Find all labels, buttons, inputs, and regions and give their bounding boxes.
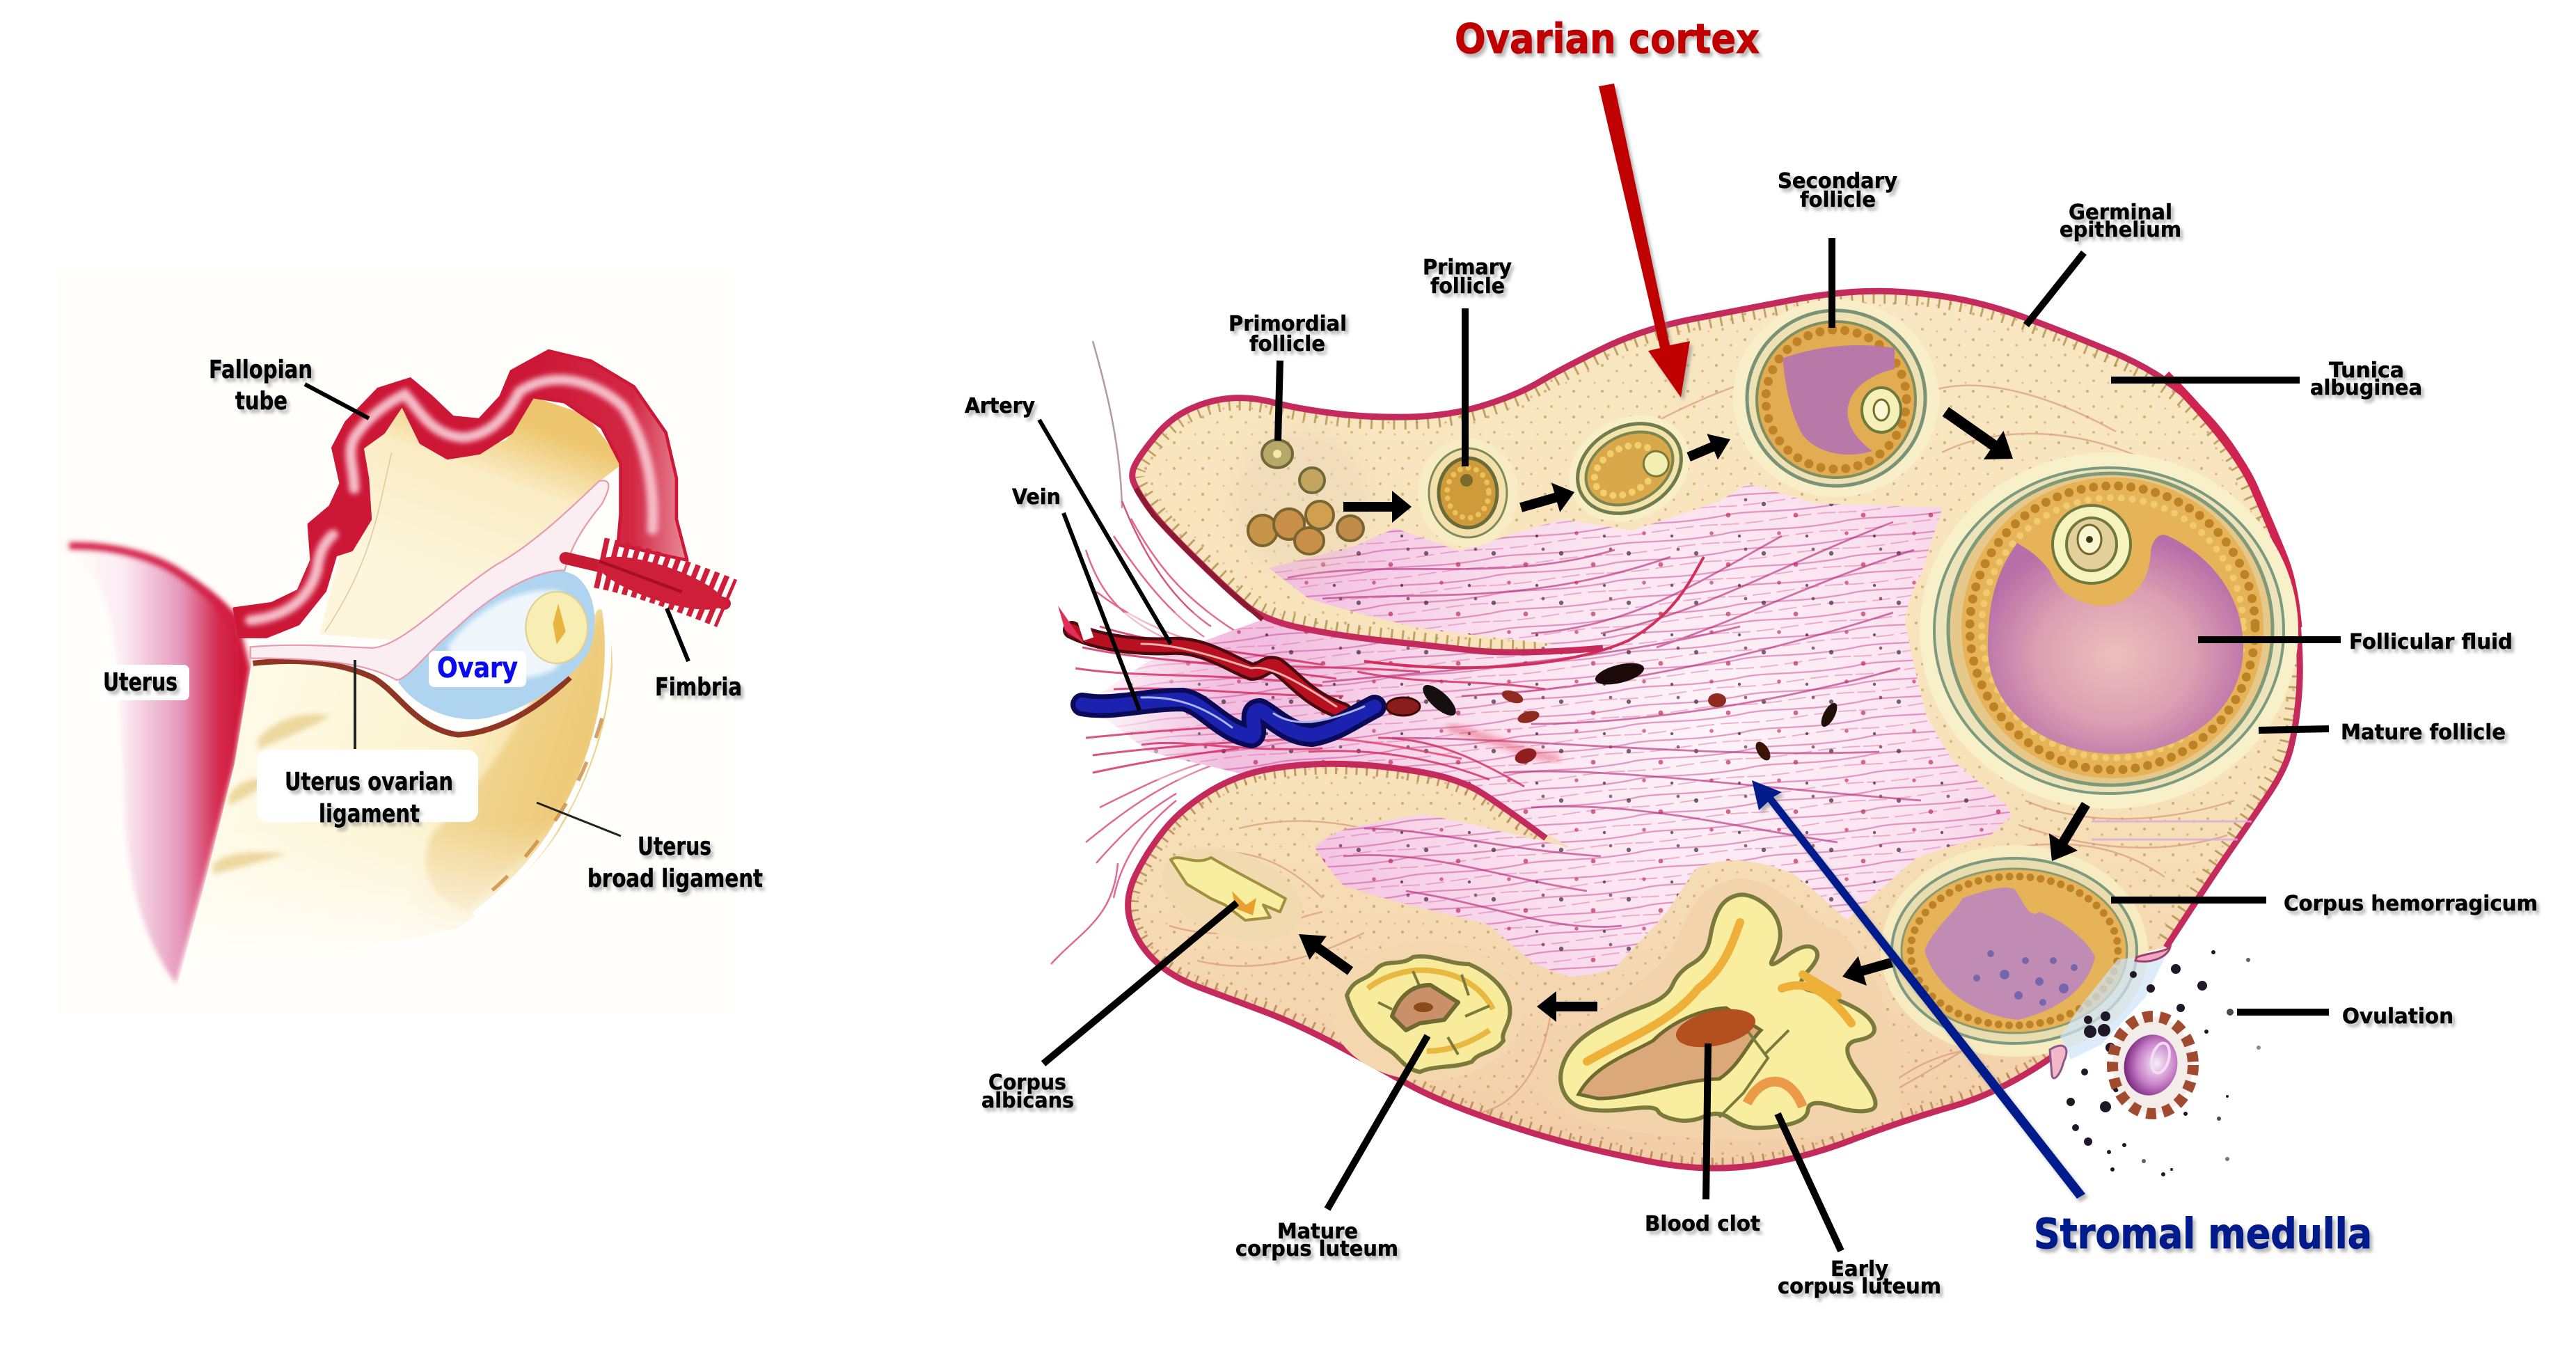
uterine wall	[58, 544, 251, 984]
label: fimbria: Fimbria	[655, 673, 742, 702]
hemorragicum granulosa	[1902, 869, 2127, 1033]
secondary antrum	[1783, 345, 1895, 455]
label box: uterus ovarian ligament	[257, 750, 478, 822]
corpus hemorragicum	[1881, 845, 2148, 1057]
ligament edge brown dashes	[490, 718, 602, 892]
artery highlight	[1141, 644, 1336, 707]
label: artery: Artery	[965, 394, 1035, 418]
secondary granules	[1766, 330, 1906, 469]
albicans body	[1171, 858, 1286, 920]
ovum highlight	[2149, 1041, 2172, 1075]
fallopian tube	[235, 351, 687, 637]
leader: uterus ovarian ligament	[354, 660, 356, 749]
mature granules inner	[1982, 498, 2243, 758]
medulla lower red stream	[1448, 727, 1559, 759]
label: secondary follicle: follicle	[1800, 188, 1876, 212]
mesosalpinx	[319, 397, 623, 642]
primordial follicle	[1299, 468, 1325, 493]
secondary halo	[1733, 299, 1939, 497]
label: primordial follicle	[1228, 312, 1347, 356]
rupture rim lower	[2050, 1046, 2067, 1078]
leader: tunica albuginea	[2111, 377, 2300, 384]
artifact strip	[2092, 821, 2252, 839]
early luteum inner groove	[1747, 1082, 1803, 1107]
mature granulosa	[1961, 478, 2263, 778]
leader lines	[1039, 238, 2341, 1251]
label: tunica albuginea: Tunica	[2329, 358, 2404, 383]
artery fill	[1072, 630, 1343, 711]
label: mature corpus luteum: Mature	[1277, 1220, 1358, 1244]
oocyte	[2078, 525, 2101, 554]
panel: uterus and ovary location	[57, 270, 763, 1016]
ovary highlight	[448, 590, 573, 680]
labels: left panel	[103, 356, 763, 893]
arrow: primordial to primary	[1343, 491, 1412, 523]
early luteum folds orange	[1587, 922, 1851, 1062]
leader: broad ligament	[537, 803, 621, 836]
follicle centre	[553, 604, 566, 645]
mature luteum folds	[1368, 970, 1493, 1051]
growing granules	[1586, 435, 1666, 506]
albicans halo	[1149, 830, 1315, 959]
label: corpus albicans: albicans	[981, 1089, 1074, 1113]
black vessel	[1818, 700, 1840, 730]
artery	[1072, 630, 1343, 711]
primordial follicle	[1262, 440, 1293, 468]
primordial follicle	[1295, 528, 1324, 554]
artery outline	[1072, 630, 1343, 711]
leader: follicular fluid	[2198, 636, 2341, 643]
mature granules outer	[1970, 486, 2255, 770]
leader: vein	[1064, 513, 1139, 710]
nucleus	[1273, 450, 1281, 458]
rupture rim upper	[2135, 947, 2170, 961]
label: fallopian tube: Fallopian	[209, 356, 313, 384]
capsule thick shoulder	[2166, 374, 2298, 628]
label: mature corpus luteum	[1235, 1220, 1398, 1261]
secondary nucleus	[1874, 400, 1889, 420]
ovarian ligament	[251, 480, 608, 680]
black vessel	[1753, 739, 1773, 763]
tube highlight	[251, 379, 653, 620]
primary follicle	[1418, 439, 1518, 547]
label: uterus: Uterus	[103, 668, 177, 697]
oocyte nucleus	[2086, 536, 2093, 543]
leader: ovulation	[2237, 1009, 2329, 1016]
primordial follicle	[1337, 516, 1364, 541]
fimbria centre line	[599, 561, 682, 592]
outer ligament edge	[474, 606, 608, 915]
label: ovulation: Ovulation	[2342, 1004, 2453, 1029]
red vessel	[1513, 746, 1538, 766]
primordial follicle	[1274, 509, 1304, 539]
fimbria fronds	[599, 562, 727, 604]
rupture patch	[2060, 955, 2166, 1059]
medulla dots	[1086, 484, 2012, 977]
vein	[1082, 697, 1375, 736]
primordial follicles	[1232, 428, 1371, 574]
label: primary follicle: Primary	[1423, 255, 1512, 280]
heading: ovarian cortex: Ovarian cortex	[1455, 15, 1760, 63]
capsule upper	[1132, 291, 2300, 947]
leader: secondary follicle	[1828, 238, 1835, 328]
arrow: stromal medulla	[1752, 780, 2085, 1199]
growing ring	[1562, 406, 1697, 531]
primary core	[1439, 458, 1497, 528]
lower ligament shading	[426, 611, 605, 913]
vein outline	[1082, 700, 1375, 736]
mature inner ring	[1948, 473, 2273, 785]
broad ligament lower	[178, 609, 613, 981]
secondary follicle	[1733, 299, 1939, 497]
growing follicle	[1551, 395, 1708, 542]
leader: mature corpus luteum	[1327, 1036, 1428, 1209]
black vessels and red cells	[1386, 659, 1840, 766]
secondary ring	[1747, 310, 1925, 486]
primordial follicle	[1306, 501, 1334, 529]
medulla red stream	[1364, 557, 1704, 668]
hemorragicum clot speckle	[1973, 950, 2078, 1006]
label: early corpus luteum: Early	[1831, 1257, 1888, 1282]
label: early corpus luteum: corpus luteum	[1778, 1275, 1941, 1299]
secondary oocyte	[1862, 388, 1901, 432]
mature luteum cavity	[1392, 985, 1458, 1030]
label: ovary: Ovary	[437, 652, 518, 684]
capsule lower	[1128, 764, 2065, 1168]
arrow: ovarian cortex	[1599, 84, 1690, 397]
mature luteum centre	[1414, 1002, 1433, 1012]
red vessel	[1386, 697, 1420, 716]
ovary	[398, 568, 594, 719]
capsule dark lower lip	[1136, 489, 1263, 620]
arrow: mature to hemorragicum	[2037, 796, 2101, 869]
peripheral stipple band upper	[1132, 291, 2300, 947]
mature luteum fold lines	[1378, 971, 1490, 1055]
medulla	[1086, 484, 2012, 977]
fimbria core	[592, 546, 729, 620]
blue arrow shaft and head	[1752, 780, 2085, 1199]
early luteum centre fold	[1719, 1030, 1789, 1117]
cumulus ring	[2067, 518, 2117, 571]
label: corpus hemorragicum: Corpus hemorragicum	[2284, 892, 2538, 916]
medulla fibres	[1086, 484, 2012, 977]
label: germinal epithelium: epithelium	[2060, 218, 2181, 242]
label box: ovary	[429, 651, 526, 687]
leader: blood clot	[1706, 1043, 1708, 1199]
ovum	[2117, 1029, 2184, 1101]
leader: early corpus luteum	[1778, 1114, 1841, 1251]
white strip	[1070, 581, 1089, 639]
early corpus luteum	[1541, 878, 1900, 1140]
vein highlight	[1141, 697, 1364, 727]
leader: corpus hemorragicum	[2111, 897, 2266, 904]
black vessel	[1419, 680, 1460, 720]
red vessel	[1516, 709, 1541, 725]
growing core	[1573, 418, 1686, 519]
primary oocyte	[1460, 474, 1473, 487]
hemorragicum ring	[1892, 858, 2137, 1043]
growing halo	[1551, 395, 1708, 542]
arrow: primary to growing	[1517, 478, 1579, 522]
hilum fan fibres	[1075, 626, 1545, 787]
ovary follicle	[526, 592, 587, 663]
heading: stromal medulla: Stromal medulla	[2034, 1210, 2372, 1259]
panel backdrop	[57, 270, 732, 1016]
mature corpus luteum	[1331, 941, 1523, 1080]
hemorragicum halo	[1881, 845, 2148, 1057]
label: germinal epithelium	[2060, 200, 2181, 242]
hilum fringe fibres	[1051, 341, 1253, 964]
mature follicle	[1920, 452, 2298, 809]
stage arrows	[1290, 397, 2101, 1022]
leader: corpus albicans	[1043, 903, 1237, 1064]
label: fallopian tube: tube	[235, 387, 287, 416]
peripheral stipple band lower	[1128, 764, 2065, 1168]
label: uterus ovarian ligament: Uterus ovarian	[285, 768, 453, 796]
lower ligament fade	[178, 609, 613, 981]
label: fallopian tube	[209, 356, 313, 416]
label: uterus broad ligament: broad ligament	[587, 865, 763, 893]
secondary theca	[1757, 322, 1915, 478]
label: uterus ovarian ligament	[285, 768, 453, 828]
hemorragicum granules	[1911, 876, 2118, 1025]
vein fill	[1082, 700, 1375, 736]
primordial follicle	[1248, 515, 1277, 546]
pink vessel stub	[1058, 606, 1084, 644]
red arrow shaft and head	[1599, 84, 1690, 397]
label: vein: Vein	[1012, 485, 1061, 510]
leader: primary follicle	[1462, 308, 1469, 466]
panel: ovary cross-section	[965, 15, 2538, 1299]
blood clot	[1673, 1002, 1759, 1054]
labels: ovary section	[965, 169, 2538, 1299]
label: uterus broad ligament: Uterus	[638, 833, 711, 861]
ovary body	[1128, 291, 2300, 1168]
label: primary follicle	[1423, 255, 1512, 299]
early luteum cavity	[1579, 1008, 1761, 1098]
arrow: growing to secondary	[1683, 427, 1736, 470]
label: primary follicle: follicle	[1430, 274, 1505, 299]
label: mature corpus luteum: corpus luteum	[1235, 1237, 1398, 1261]
primary ring	[1429, 448, 1507, 537]
albicans orange centre	[1232, 891, 1256, 915]
label: early corpus luteum	[1778, 1257, 1941, 1299]
label: blood clot: Blood clot	[1645, 1212, 1760, 1236]
cortex stipple	[1128, 291, 2300, 1168]
label: secondary follicle	[1778, 169, 1897, 212]
mature halo	[1920, 452, 2298, 809]
label: tunica albuginea: albuginea	[2310, 376, 2422, 400]
label: corpus albicans	[981, 1071, 1074, 1113]
hilum fade	[1072, 613, 1225, 780]
hemorragicum cavity	[1925, 888, 2095, 1020]
arrow: hemorragicum to early luteum	[1838, 947, 1896, 991]
follicular fluid antrum	[1988, 535, 2243, 754]
ovum corona	[2112, 1016, 2193, 1114]
arrow: early to mature luteum	[1537, 991, 1597, 1022]
early luteum body	[1560, 894, 1876, 1128]
illustration: uterus, tube and ligaments	[58, 351, 729, 984]
label: corpus albicans: Corpus	[988, 1071, 1066, 1095]
medulla long fibres	[1288, 522, 1921, 927]
ovulation burst	[2050, 947, 2261, 1176]
expelled fluid dots	[2067, 950, 2261, 1176]
label: secondary follicle: Secondary	[1778, 169, 1897, 194]
label box: uterus	[96, 665, 189, 700]
label: germinal epithelium: Germinal	[2069, 200, 2172, 225]
red vessel	[1500, 688, 1525, 706]
leader: mature follicle	[2259, 729, 2329, 730]
leader: germinal epithelium	[2026, 253, 2084, 325]
black vessel	[1593, 659, 1646, 688]
label: tunica albuginea	[2310, 358, 2422, 400]
label: primordial follicle: follicle	[1249, 332, 1325, 356]
growing oocyte	[1639, 447, 1673, 481]
label: mature follicle: Mature follicle	[2341, 720, 2506, 745]
uterine top edge shade	[69, 546, 235, 624]
early luteum halo	[1541, 878, 1900, 1140]
mature luteum halo	[1331, 941, 1523, 1080]
mature luteum body	[1347, 956, 1510, 1072]
leader: artery	[1039, 420, 1171, 644]
cortex contour lines	[1169, 362, 2234, 1128]
mature outer ring	[1934, 468, 2284, 794]
cumulus oocyte outer	[2053, 505, 2131, 583]
arrow: mature luteum to albicans	[1290, 922, 1359, 983]
label: uterus ovarian ligament: ligament	[319, 800, 420, 828]
brown ligament edge	[253, 661, 570, 735]
folded edge	[325, 453, 391, 631]
primary halo	[1418, 439, 1518, 547]
primordial halo	[1232, 428, 1371, 574]
red vessel	[1708, 693, 1726, 707]
ligament fold marks	[213, 714, 330, 874]
arrow: secondary to mature	[1936, 397, 2023, 473]
leader: primordial follicle	[1278, 361, 1280, 441]
label: uterus broad ligament	[587, 833, 763, 893]
fimbria stem	[566, 558, 725, 604]
label: primordial follicle: Primordial	[1228, 312, 1347, 336]
leader: fimbria	[667, 608, 688, 661]
primary granules	[1447, 468, 1489, 518]
label: follicular fluid: Follicular fluid	[2349, 630, 2513, 654]
leader: fallopian tube	[305, 384, 369, 418]
corpus albicans	[1149, 830, 1315, 959]
